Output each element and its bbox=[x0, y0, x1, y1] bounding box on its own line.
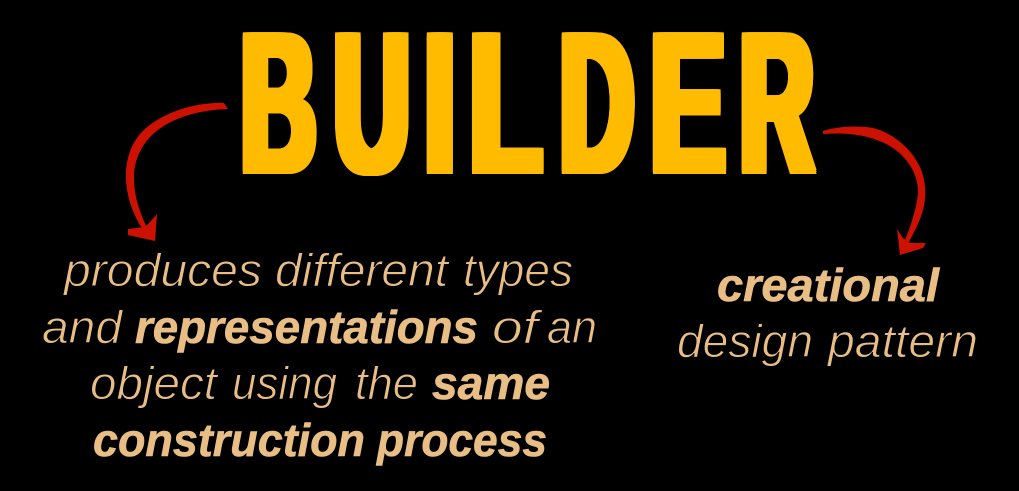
text block: builder description: the bbox=[355, 357, 418, 409]
text block: builder description: and bbox=[42, 301, 123, 353]
text block: builder description: an bbox=[547, 301, 597, 353]
text block: builder description bbox=[42, 244, 597, 466]
text block: builder description: representations bbox=[135, 301, 478, 353]
text block: builder description: of bbox=[492, 301, 543, 353]
arrow: left curved red arrow bbox=[126, 103, 228, 241]
text block: builder description: process bbox=[375, 414, 547, 466]
arrow: right curved red arrow bbox=[823, 127, 926, 255]
text block: builder description: different bbox=[275, 244, 450, 296]
text block: creational design pattern bbox=[677, 259, 978, 367]
text block: builder description: construction bbox=[93, 414, 365, 466]
text block: builder description: using bbox=[232, 357, 337, 409]
text block: creational design pattern: pattern bbox=[826, 315, 978, 367]
text block: creational design pattern: creational bbox=[717, 259, 940, 311]
title: BUILDER bbox=[241, 0, 817, 215]
text block: builder description: same bbox=[432, 357, 550, 409]
text block: builder description: object bbox=[90, 357, 219, 409]
text block: creational design pattern: design bbox=[677, 315, 813, 367]
text block: builder description: types bbox=[463, 244, 573, 296]
text block: builder description: produces bbox=[62, 244, 262, 296]
